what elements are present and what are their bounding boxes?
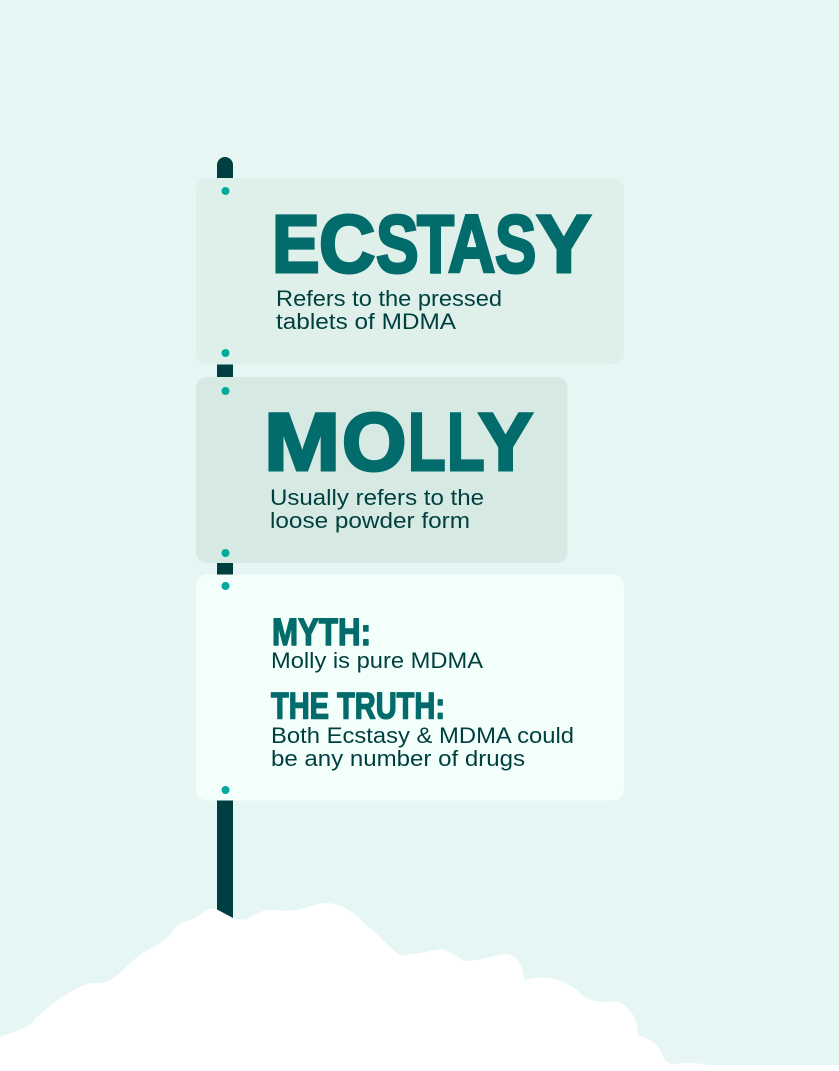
myth heading: MYTH:	[272, 612, 371, 654]
truth text: Both Ecstasy & MDMA could	[271, 723, 574, 748]
heading: E	[272, 200, 320, 290]
panel background	[196, 178, 624, 364]
heading: T	[417, 200, 454, 290]
myth text: Molly is pure MDMA	[271, 648, 483, 673]
description: tablets of MDMA	[276, 309, 456, 334]
heading: L	[447, 398, 485, 488]
rivet top	[222, 582, 230, 590]
truth text: be any number of drugs	[271, 746, 525, 771]
heading	[260, 398, 550, 488]
snow mound	[0, 903, 839, 1071]
heading: S	[495, 200, 536, 290]
rivet bottom	[222, 349, 230, 357]
panel: molly	[196, 377, 568, 563]
description: loose powder form	[270, 508, 470, 533]
heading: A	[448, 200, 496, 290]
rivet bottom	[222, 786, 230, 794]
rivet top	[222, 187, 230, 195]
panel: myth and truth	[196, 574, 624, 800]
description	[270, 485, 484, 533]
heading: Y	[478, 398, 533, 488]
heading: O	[342, 398, 406, 488]
truth heading: THE TRUTH:	[271, 686, 445, 726]
description: Refers to the pressed	[276, 286, 502, 311]
truth text	[271, 723, 574, 771]
panel background	[196, 574, 624, 800]
panel: ecstasy	[196, 178, 624, 364]
heading: M	[264, 398, 341, 488]
panel background	[196, 377, 568, 563]
heading: C	[318, 200, 375, 290]
rivet top	[222, 387, 230, 395]
heading: Y	[536, 200, 591, 290]
description	[276, 286, 502, 334]
rivet bottom	[222, 549, 230, 557]
heading: S	[376, 200, 418, 290]
signpost pole	[217, 157, 233, 918]
description: Usually refers to the	[270, 485, 484, 510]
heading: L	[408, 398, 445, 488]
heading	[260, 200, 600, 290]
